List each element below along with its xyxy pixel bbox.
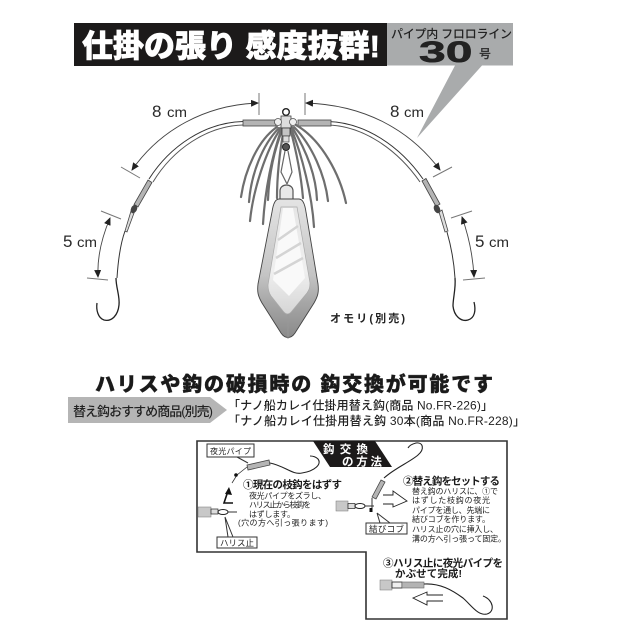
panel: hook exchange method — [197, 441, 507, 619]
dimension: left 8cm: cm — [167, 104, 187, 120]
step 2 text: ②替え鈎をセットする — [403, 474, 500, 488]
step 1 text: 夜光パイプをズラし、 — [249, 490, 326, 500]
step 1 illustration — [198, 444, 319, 548]
dimension: left 8cm: 8 — [152, 102, 161, 121]
step 2 text: ハリス止の穴に挿入し、 — [412, 524, 498, 534]
step 3 text: かぶせて完成! — [395, 567, 462, 580]
swivel and connector — [274, 109, 296, 200]
tab: method heading: 鈎交換 — [323, 442, 368, 456]
dimension: right 8cm: 8 — [390, 102, 399, 121]
step 2 text: 溝の方へ引っ張って固定。 — [412, 534, 506, 544]
callout: pipe line size: 号 — [479, 47, 491, 61]
dimension: left 5cm: 5 — [63, 232, 72, 251]
sinker weight — [258, 199, 318, 339]
callout: pipe line size: 30 — [419, 36, 472, 69]
tag: recommended replacement products — [68, 397, 227, 423]
step 1 text: ①現在の枝鈎をはずす — [243, 478, 342, 491]
dimension: right 5cm: cm — [489, 234, 509, 250]
dimension: left 5cm — [63, 211, 121, 280]
dimension: right 8cm — [305, 93, 452, 177]
label: sinker sold separately: オモリ(別売) — [330, 311, 405, 325]
dimension: right 5cm — [451, 211, 509, 280]
tab: method heading: の方法 — [342, 454, 382, 468]
step 2 illustration: 結びコブ — [369, 524, 404, 534]
step 3 illustration — [380, 580, 492, 614]
rig diagram right arm — [298, 120, 475, 320]
step 1 text: (穴の方へ引っ張ります) — [238, 518, 328, 528]
product list: 「ナノ船カレイ仕掛用替え鈎(商品 No.FR-226)」 — [228, 398, 493, 412]
product list: 「ナノ船カレイ仕掛用替え鈎 30本(商品 No.FR-228)」 — [228, 413, 525, 428]
step 1 illustration: 夜光パイプ — [210, 446, 251, 456]
step 3 text — [383, 556, 503, 580]
step 2 text: 結びコブを作ります。 — [412, 514, 490, 524]
skirt strands — [241, 125, 346, 227]
rig diagram left arm — [97, 120, 276, 320]
step 1 illustration: ハリス止 — [220, 538, 254, 548]
heading: hook replacement: ハリスや鈎の破損時の 鈎交換が可能です — [95, 372, 493, 396]
dimension: left 8cm — [121, 93, 259, 178]
step 3 text: ③ハリス止に夜光パイプを — [383, 556, 503, 570]
dimension: right 5cm: 5 — [475, 232, 484, 251]
title banner: 仕掛の張り 感度抜群! — [82, 29, 380, 64]
step 2 text: はずした枝鈎の夜光 — [412, 495, 490, 505]
callout: pipe line size: パイプ内 フロロライン — [391, 26, 512, 41]
step 1 text: ハリス止から枝鈎を — [249, 500, 311, 510]
step 2 text: 替え鈎のハリスに、①で — [412, 486, 498, 496]
tab: method heading — [313, 441, 392, 468]
dimension: left 5cm: cm — [77, 234, 97, 250]
callout: pipe line size — [387, 23, 513, 138]
product list — [228, 398, 525, 428]
tag: recommended replacement products: 替え鈎おすすめ商品(別売) — [73, 404, 213, 419]
step 1 text: はずします。 — [249, 509, 295, 519]
step 2 text: パイプを通し、先端に — [412, 505, 490, 515]
step 1 text — [238, 478, 342, 528]
step 2 illustration — [336, 443, 422, 534]
step 2 text — [403, 474, 506, 544]
dimension: right 8cm: cm — [404, 104, 424, 120]
